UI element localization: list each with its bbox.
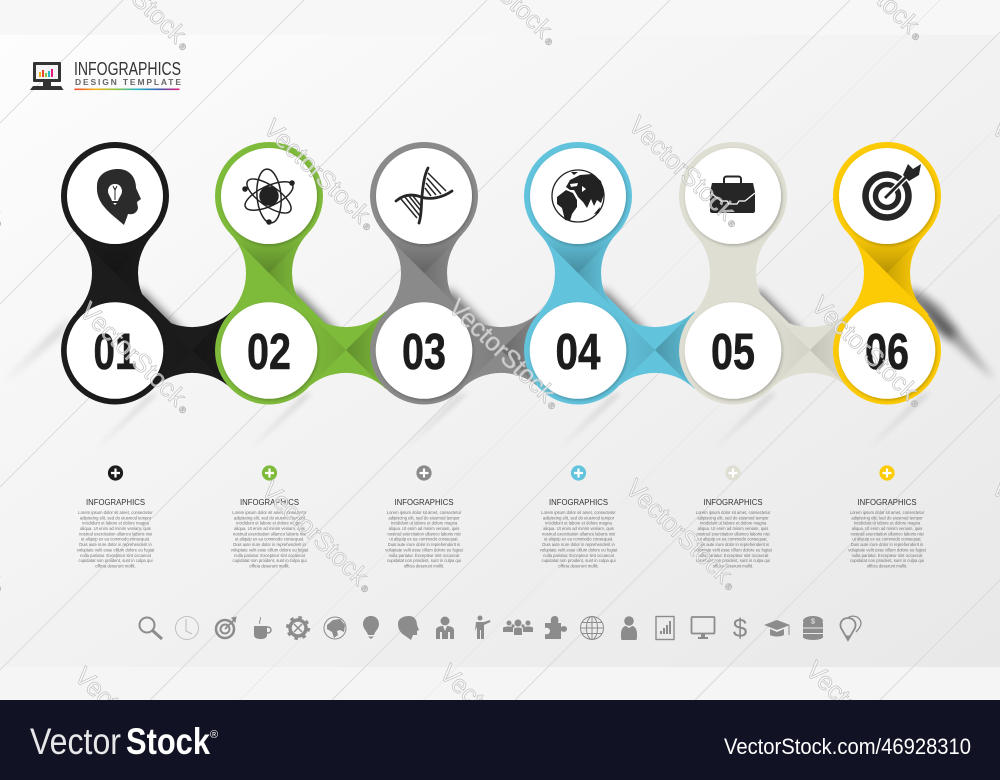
watermarks: VectorStock® xyxy=(74,297,198,419)
body 01: Lorem ipsum dolor sit amet, consectetur xyxy=(78,510,153,515)
body 04 xyxy=(540,510,618,568)
body 06: officia deserunt mollit. xyxy=(867,564,907,568)
number 04: 04 xyxy=(556,323,601,380)
body 05: Lorem ipsum dolor sit amet, consectetur xyxy=(696,510,771,515)
body 06: adipiscing elit, sed do eiusmod tempor xyxy=(851,515,923,520)
body 01: nulla pariatur. Excepteur sint occaecat xyxy=(80,553,152,558)
icon: dollar: $ xyxy=(733,613,748,643)
body 02: officia deserunt mollit. xyxy=(249,564,290,568)
body 04: Lorem ipsum dolor sit amet, consectetur xyxy=(541,510,616,515)
heading 04: INFOGRAPHICS xyxy=(549,498,608,507)
body 04: adipiscing elit, sed do eiusmod tempor xyxy=(543,515,615,520)
body 06: Duis aute irure dolor in reprehenderit in xyxy=(851,542,924,547)
icon: coffee cup xyxy=(254,617,271,639)
body 01: adipiscing elit, sed do eiusmod tempor xyxy=(80,515,152,520)
body 03: ut aliquip ex ea commodo consequat. xyxy=(389,537,459,542)
body 02: nostrud exercitation ullamco laboris nisi xyxy=(233,531,306,536)
plus button 01 xyxy=(108,465,123,481)
logo xyxy=(30,59,181,90)
number 05: 05 xyxy=(711,323,755,380)
icon: monitor xyxy=(30,62,64,90)
heading 02: INFOGRAPHICS xyxy=(240,498,299,507)
icon: user xyxy=(621,616,637,640)
column 02 text xyxy=(231,465,309,568)
body 04: officia deserunt mollit. xyxy=(558,564,599,568)
body 04: nulla pariatur. Excepteur sint occaecat xyxy=(543,553,615,558)
icon: tablet chart xyxy=(656,616,674,640)
body 02: Duis aute irure dolor in reprehenderit in xyxy=(233,542,306,547)
step 02 node xyxy=(215,142,388,404)
body 04: aliqua. Ut enim ad minim veniam, quis xyxy=(543,526,614,531)
body 03: Duis aute irure dolor in reprehenderit in xyxy=(388,542,461,547)
icon: target xyxy=(216,617,236,638)
body 03: voluptate velit esse cillum dolore eu fugiat xyxy=(385,547,464,552)
heading 01: INFOGRAPHICS xyxy=(86,498,145,507)
plus button 04 xyxy=(571,465,586,481)
diagonal shadows xyxy=(2,290,995,452)
icon: puzzle xyxy=(545,616,567,639)
body 06: incididunt ut labore et dolore magna xyxy=(854,521,921,526)
body 05: aliqua. Ut enim ad minim veniam, quis xyxy=(698,526,768,531)
body 06: nostrud exercitation ullamco laboris nisi xyxy=(850,531,924,536)
body 05: incididunt ut labore et dolore magna xyxy=(700,521,767,526)
body 02: aliqua. Ut enim ad minim veniam, quis xyxy=(234,526,305,531)
number 03: 03 xyxy=(402,323,446,380)
body 02: Lorem ipsum dolor sit amet, consectetur xyxy=(232,510,307,515)
body 04: cupidatat non proident, sunt in culpa qui xyxy=(541,558,616,563)
plus button 03 xyxy=(416,465,432,481)
body 03: cupidatat non proident, sunt in culpa qui xyxy=(387,558,461,563)
body 05 xyxy=(694,510,773,568)
body 06: cupidatat non proident, sunt in culpa qui xyxy=(850,558,924,563)
body 05: voluptate velit esse cillum dolore eu fugiat xyxy=(694,547,773,552)
icon: coins xyxy=(803,616,823,640)
icon: graduation cap xyxy=(764,620,790,636)
footer logo xyxy=(30,721,218,762)
icon: globe xyxy=(552,170,604,222)
logo title: INFOGRAPHICS xyxy=(74,59,181,79)
body 03: aliqua. Ut enim ad minim veniam, quis xyxy=(389,526,459,531)
body 04: Duis aute irure dolor in reprehenderit in xyxy=(542,542,615,547)
body 03: nostrud exercitation ullamco laboris nisi xyxy=(387,531,461,536)
icon: magnifier xyxy=(140,618,162,639)
body 04: voluptate velit esse cillum dolore eu fugiat xyxy=(540,547,618,552)
footer url: VectorStock.com/46928310 xyxy=(724,734,971,759)
number 02: 02 xyxy=(247,323,291,380)
body 02: ut aliquip ex ea commodo consequat. xyxy=(235,537,304,542)
footer logo: ® xyxy=(210,729,218,741)
body 01: cupidatat non proident, sunt in culpa qui xyxy=(78,558,153,563)
body 05: officia deserunt mollit. xyxy=(713,564,753,568)
icon row xyxy=(140,613,861,643)
column 06 text xyxy=(848,465,927,568)
body 06: ut aliquip ex ea commodo consequat. xyxy=(852,537,922,542)
icon: target xyxy=(866,164,921,218)
body 02: incididunt ut labore et dolore magna xyxy=(236,521,303,526)
watermarks: VectorStock® xyxy=(443,293,567,415)
body 01: Duis aute irure dolor in reprehenderit in xyxy=(79,542,152,547)
step 05 node xyxy=(679,142,852,404)
number 01: 01 xyxy=(94,323,136,380)
icon: presenter figure xyxy=(475,616,490,639)
body 01: voluptate velit esse cillum dolore eu fugiat xyxy=(77,547,155,552)
watermarks: VectorStock xyxy=(69,662,186,777)
body 05: cupidatat non proident, sunt in culpa qui xyxy=(696,558,770,563)
heading 03: INFOGRAPHICS xyxy=(394,498,454,507)
number 06: 06 xyxy=(865,323,909,380)
body 05: nulla pariatur. Excepteur sint occaecat xyxy=(698,553,769,558)
footer logo: Stock xyxy=(126,721,210,762)
step 04 node xyxy=(524,142,697,404)
body 06: nulla pariatur. Excepteur sint occaecat xyxy=(852,553,923,558)
icon: dna xyxy=(396,168,452,223)
body 01 xyxy=(77,510,155,568)
body 03 xyxy=(385,510,464,568)
plus button 02 xyxy=(262,465,277,481)
icon: atom xyxy=(241,168,297,224)
heading 06: INFOGRAPHICS xyxy=(858,498,916,507)
column 03 text xyxy=(385,465,464,568)
icon: monitor xyxy=(692,617,714,639)
step 01 node xyxy=(61,142,234,404)
body 05: nostrud exercitation ullamco laboris nisi xyxy=(696,531,770,536)
body 04: incididunt ut labore et dolore magna xyxy=(545,521,612,526)
step 03 node xyxy=(370,142,543,404)
icon: coins: $ xyxy=(811,618,815,626)
body 03: incididunt ut labore et dolore magna xyxy=(391,521,458,526)
body 05: ut aliquip ex ea commodo consequat. xyxy=(698,537,768,542)
body 05: Duis aute irure dolor in reprehenderit in xyxy=(697,542,770,547)
column 05 text xyxy=(694,465,773,568)
logo subtitle: DESIGN TEMPLATE xyxy=(75,77,181,87)
icon: clock xyxy=(176,616,198,640)
body 02: cupidatat non proident, sunt in culpa qui xyxy=(232,558,307,563)
body 05: adipiscing elit, sed do eiusmod tempor xyxy=(697,515,769,520)
body 02 xyxy=(231,510,309,568)
plus button 06 xyxy=(879,465,895,481)
icon: person in suit xyxy=(436,616,454,639)
watermarks: VectorStock xyxy=(800,656,917,771)
watermarks: VectorStock xyxy=(434,659,551,774)
icon: head xyxy=(398,616,419,640)
footer bar xyxy=(0,700,1000,780)
body 03: adipiscing elit, sed do eiusmod tempor xyxy=(388,515,460,520)
body 02: voluptate velit esse cillum dolore eu fugiat xyxy=(231,547,309,552)
body 03: Lorem ipsum dolor sit amet, consectetur xyxy=(387,510,462,515)
icon: bulb xyxy=(363,616,379,639)
body 01: nostrud exercitation ullamco laboris nisi xyxy=(79,531,152,536)
plus button 05 xyxy=(725,465,741,481)
heading 05: INFOGRAPHICS xyxy=(704,498,762,507)
step 06 node xyxy=(833,142,941,404)
body 01: aliqua. Ut enim ad minim veniam, quis xyxy=(80,526,151,531)
body 02: nulla pariatur. Excepteur sint occaecat xyxy=(234,553,306,558)
watermarks: VectorStock® xyxy=(256,476,380,598)
icon: briefcase xyxy=(710,176,755,213)
watermarks: VectorStock® xyxy=(806,291,930,413)
body 01: incididunt ut labore et dolore magna xyxy=(82,521,149,526)
body 06: Lorem ipsum dolor sit amet, consectetur xyxy=(850,510,925,515)
icon: gear xyxy=(288,618,308,638)
icon: globe xyxy=(324,617,346,639)
column 01 text xyxy=(77,465,155,568)
body 06 xyxy=(848,510,927,568)
body 06: aliqua. Ut enim ad minim veniam, quis xyxy=(852,526,922,531)
body 01: ut aliquip ex ea commodo consequat. xyxy=(81,537,150,542)
icon: head with bulb xyxy=(97,169,141,225)
icon: map pins xyxy=(840,616,861,640)
watermarks: VectorStock® xyxy=(258,114,382,236)
column 04 text xyxy=(540,465,618,568)
body 06: voluptate velit esse cillum dolore eu fugiat xyxy=(848,547,927,552)
watermarks: VectorStock® xyxy=(620,474,744,596)
body 02: adipiscing elit, sed do eiusmod tempor xyxy=(234,515,306,520)
watermarks: VectorStock® xyxy=(623,111,747,233)
icon: wire globe xyxy=(580,616,604,640)
body 03: officia deserunt mollit. xyxy=(404,564,444,568)
body 04: ut aliquip ex ea commodo consequat. xyxy=(544,537,613,542)
icon: team xyxy=(503,620,533,635)
body 03: nulla pariatur. Excepteur sint occaecat xyxy=(389,553,460,558)
body 01: officia deserunt mollit. xyxy=(95,564,136,568)
body 04: nostrud exercitation ullamco laboris nisi xyxy=(542,531,615,536)
footer logo: Vector xyxy=(30,721,121,762)
